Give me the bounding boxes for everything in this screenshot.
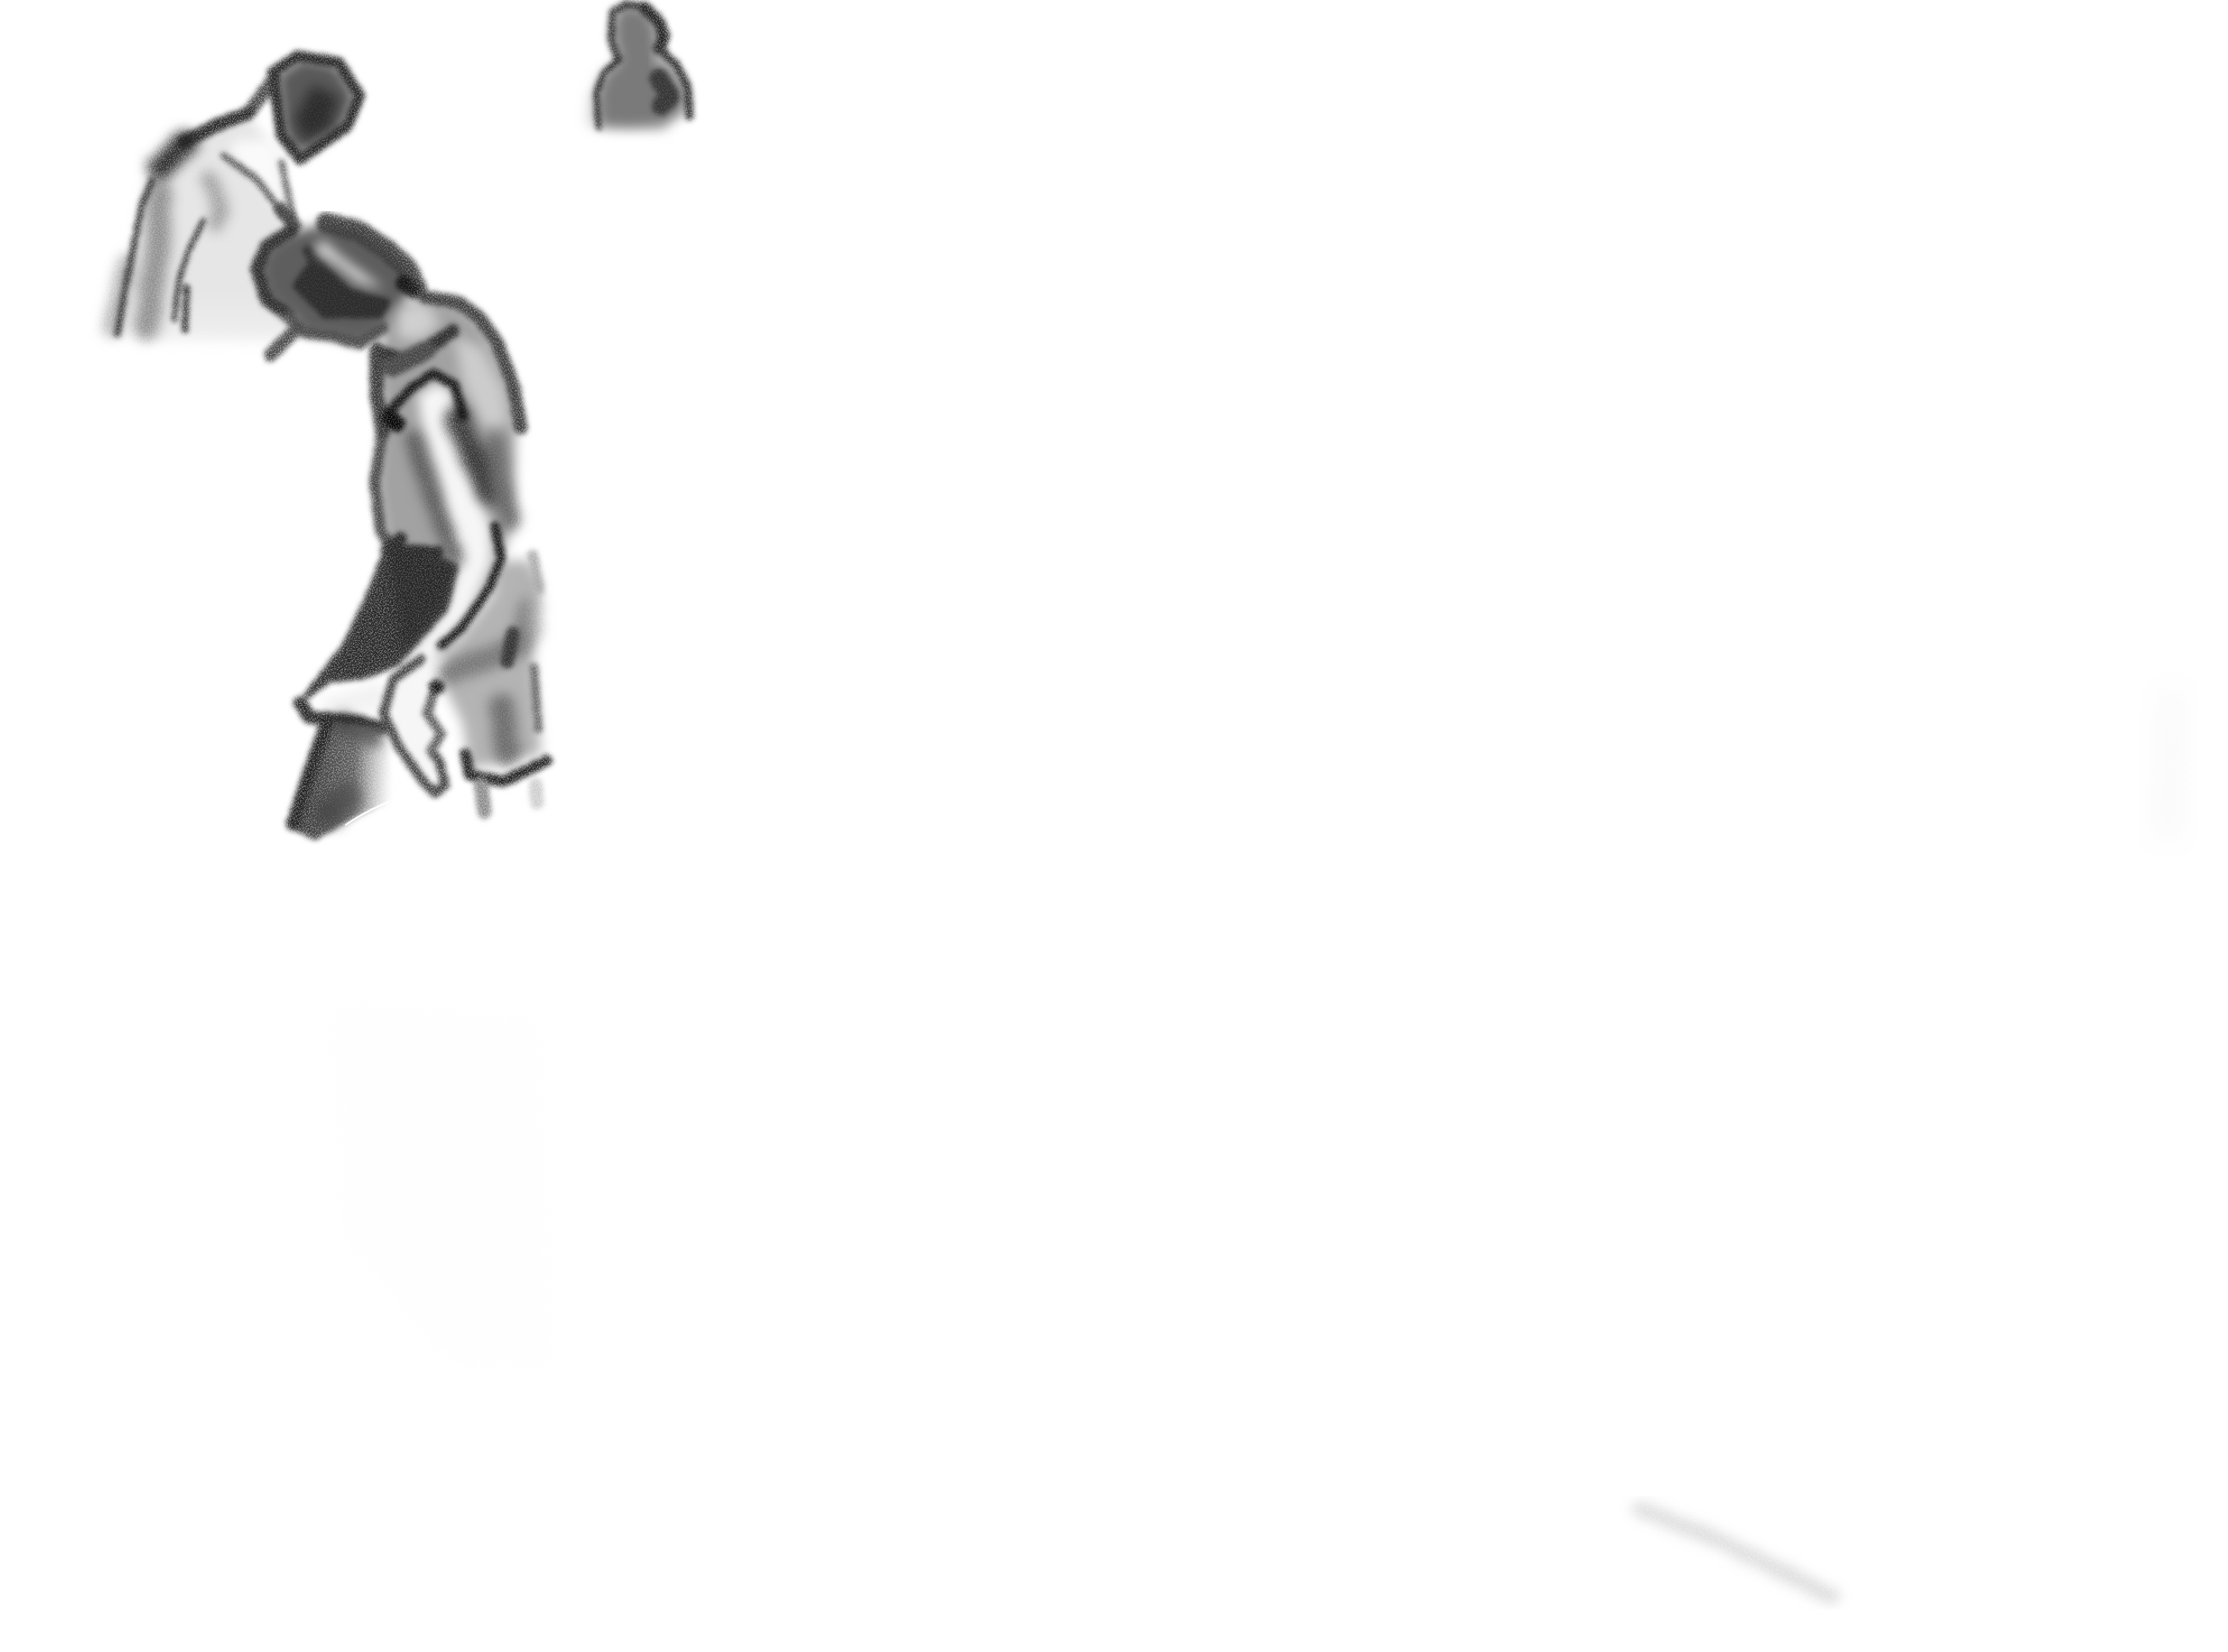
- back upper lighter fill: bent man: [454, 336, 507, 426]
- shorts marks: [507, 633, 513, 661]
- head fill: background man: [277, 58, 355, 155]
- shorts fill: bent man: [443, 561, 541, 769]
- halo: distant person: [586, 70, 667, 132]
- charcoal strokes: distant person: [597, 4, 690, 128]
- back outline: [425, 297, 521, 428]
- torso outline: [375, 432, 392, 547]
- neck fill: bent man: [395, 303, 440, 339]
- faint smudge right edge: [2150, 690, 2187, 841]
- head highlight: bent man: [315, 238, 384, 289]
- charcoal streak bottom right: [1640, 1509, 1832, 1597]
- armhole: [389, 373, 463, 417]
- collar: [383, 331, 453, 359]
- body fill: distant person: [598, 4, 685, 128]
- head shading: bent man: [257, 223, 416, 343]
- hairline highlight on trouser leg: [345, 802, 389, 825]
- head fill: bent man: [258, 224, 415, 344]
- light hem tip: bent man: [317, 681, 387, 712]
- figure: foreground bent man: [257, 209, 547, 841]
- trouser leg dark: [292, 720, 392, 841]
- body fill: background man: [117, 113, 297, 343]
- shorts dark panel: [307, 548, 455, 695]
- torso fill: bent man: [377, 300, 516, 661]
- highlight: distant person neck: [651, 52, 666, 66]
- shading: bent man: [331, 418, 535, 813]
- neck highlight: background man: [230, 140, 286, 224]
- shorts hem: [465, 754, 547, 781]
- charcoal strokes: background man: [117, 56, 359, 334]
- shading: background man: [111, 84, 339, 328]
- figure: small distant person: [586, 4, 690, 132]
- faint smudges: [336, 1009, 549, 1368]
- outer arm line: [441, 526, 501, 645]
- inner arm and hand: [383, 659, 445, 793]
- arm fill: bent man: [387, 382, 492, 788]
- figure: background man leaning over: [111, 56, 359, 343]
- nose and chin stub: [271, 331, 295, 355]
- shorts fold: [301, 703, 381, 729]
- legs below shorts: [481, 785, 484, 812]
- charcoal strokes: bent man: [271, 209, 547, 841]
